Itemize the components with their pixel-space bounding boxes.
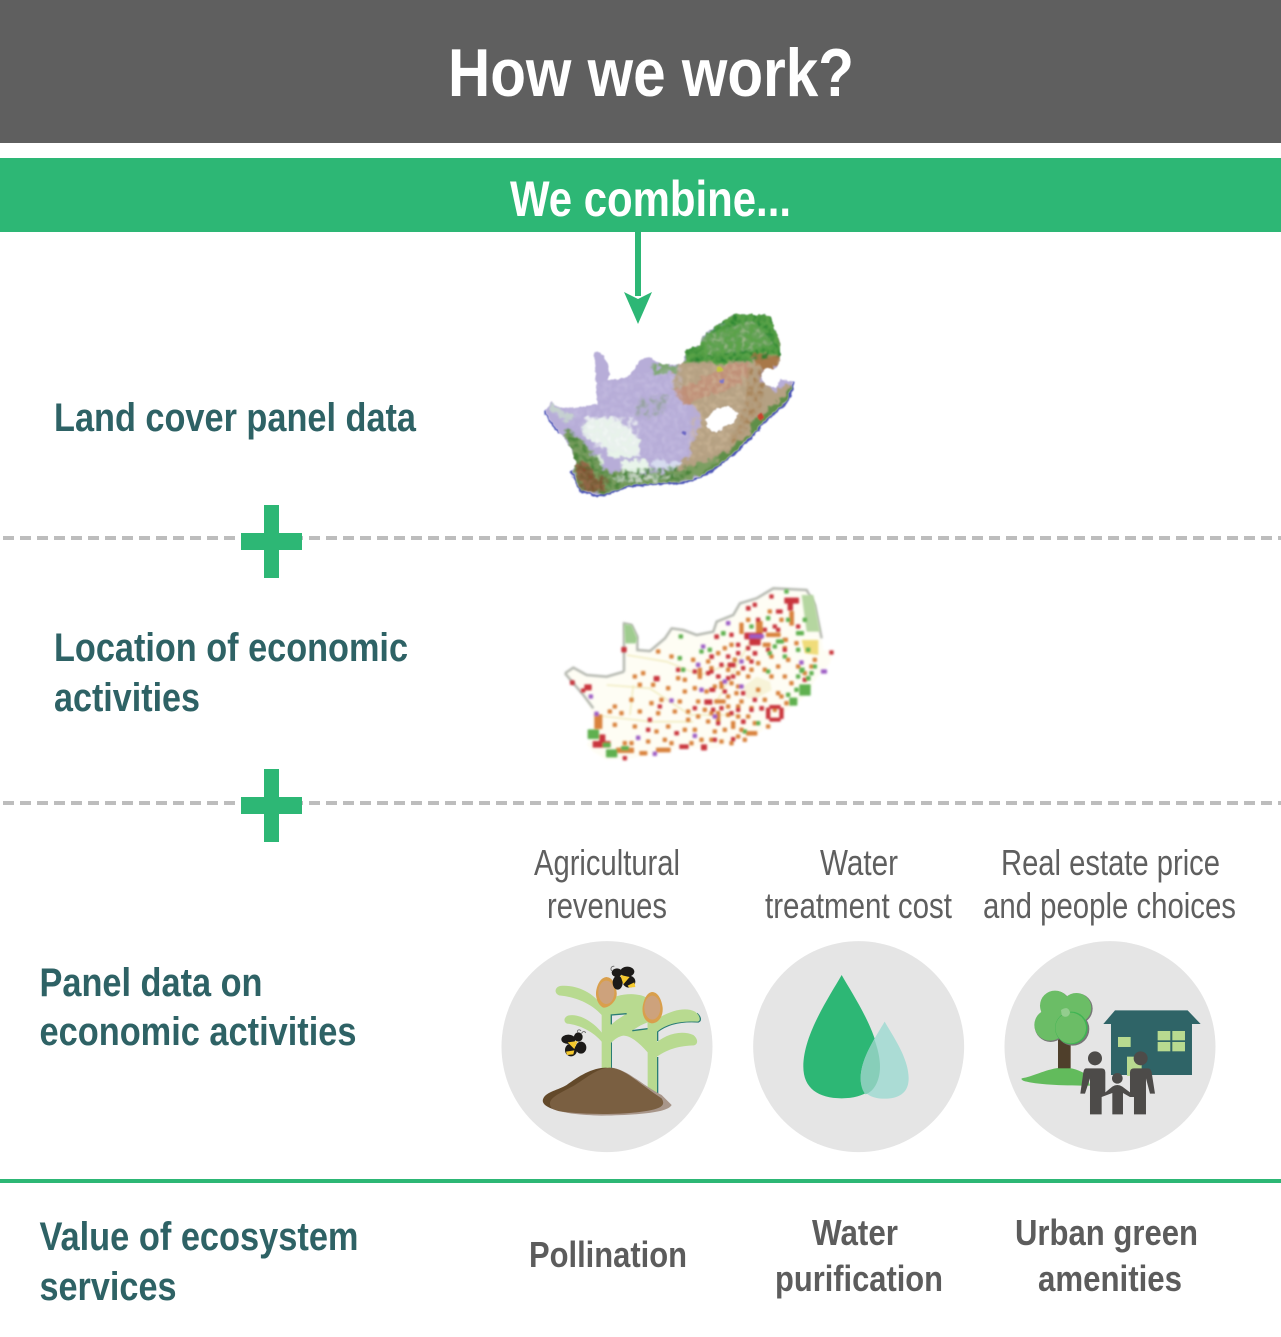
leaves between plants: [603, 994, 652, 1056]
icon: urban green, house and family: [1004, 941, 1215, 1152]
label: agricultural revenues: Agricultural: [534, 842, 680, 883]
heading: location of economic activities: activities: [54, 676, 200, 720]
heading: value of ecosystem services: [40, 1215, 358, 1309]
small drop: [861, 1022, 909, 1099]
label: urban green amenities: amenities: [1038, 1258, 1182, 1299]
northern border: [565, 588, 822, 708]
heading: location of economic activities: [54, 626, 408, 720]
heading: panel data on economic activities: economic activities: [40, 1010, 356, 1054]
bee lower: [561, 1030, 586, 1056]
country shape: [565, 588, 833, 760]
heading: location of economic activities: Location of economic: [54, 626, 408, 670]
heading: panel data on economic activities: [40, 961, 356, 1054]
right plant: [648, 1009, 700, 1096]
dashed divider 1: [3, 536, 1281, 540]
label: water treatment cost: Water: [820, 842, 898, 883]
label: pollination: Pollination: [529, 1234, 687, 1275]
tree: [1034, 991, 1093, 1068]
header bar: [0, 0, 1281, 143]
left plant: [556, 986, 611, 1070]
drop overlap: [861, 1040, 880, 1094]
dashed divider 2: [3, 801, 1281, 805]
coastal edge: [544, 382, 794, 496]
green rule: [0, 1179, 1281, 1183]
label: real estate price and people choices: Real estate price: [1001, 842, 1220, 883]
plus sign 2: [241, 769, 302, 842]
label: urban green amenities: [1015, 1212, 1198, 1299]
park patches: [624, 595, 820, 698]
family: [1080, 1051, 1155, 1114]
icon: water drops: [753, 941, 964, 1152]
large drop: [803, 975, 880, 1098]
heading: panel data on economic activities: Panel data on: [40, 961, 262, 1005]
label: water treatment cost: treatment cost: [765, 885, 952, 926]
label: water treatment cost: [765, 842, 952, 926]
bee upper: [611, 966, 635, 990]
label: water purification: purification: [775, 1258, 943, 1299]
speckled cover: [685, 312, 783, 363]
label: water purification: Water: [812, 1212, 898, 1253]
label: urban green amenities: Urban green: [1015, 1212, 1198, 1253]
arrow down: [624, 232, 652, 324]
heading: value of ecosystem services: services: [40, 1265, 176, 1309]
label: water purification: [775, 1212, 943, 1299]
title: How we work?: [448, 35, 854, 111]
heading: land cover: Land cover panel data: [54, 396, 417, 440]
activity dots: [571, 590, 833, 760]
roads: [593, 642, 750, 722]
house: [1103, 1010, 1201, 1076]
soil mound: [543, 1068, 672, 1116]
label: agricultural revenues: revenues: [547, 885, 667, 926]
plus sign 1: [241, 505, 302, 578]
map: location of economic activities: [565, 588, 833, 760]
banner text: We combine...: [510, 171, 791, 227]
label: real estate price and people choices: [983, 842, 1236, 926]
icon: plants, soil and bees: [501, 941, 712, 1152]
grain heads: [596, 977, 663, 1023]
heading: value of ecosystem services: Value of ecosystem: [40, 1215, 358, 1259]
green banner: [0, 158, 1281, 232]
land cover textures: [540, 310, 800, 500]
lawn: [1022, 1068, 1090, 1086]
label: agricultural revenues: [534, 842, 680, 926]
map: land cover of South Africa: [540, 310, 800, 500]
